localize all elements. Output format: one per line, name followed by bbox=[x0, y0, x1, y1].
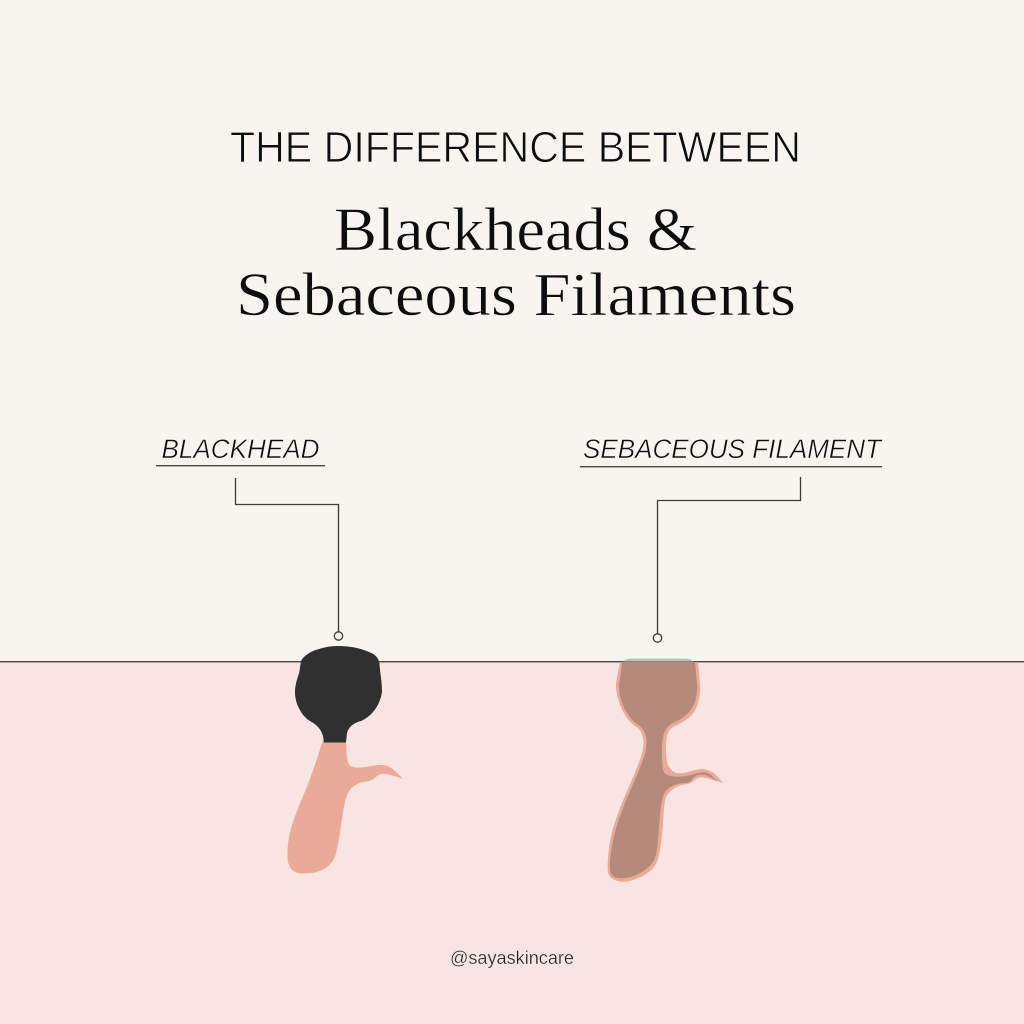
label: sebaceous filament: SEBACEOUS FILAMENT bbox=[583, 434, 883, 464]
label: blackhead: BLACKHEAD bbox=[162, 434, 320, 464]
title bbox=[230, 124, 801, 329]
title line: sebaceous filaments: Sebaceous Filaments bbox=[236, 262, 796, 329]
handle credit: @sayaskincare bbox=[450, 947, 574, 968]
filament sebum at surface bbox=[623, 658, 694, 662]
pore base bbox=[287, 740, 403, 874]
leader line: blackhead bbox=[236, 478, 343, 640]
blackhead plug bbox=[295, 646, 382, 742]
skin background panel bbox=[0, 662, 1024, 1024]
pore lining bbox=[608, 662, 723, 882]
diagram: blackhead pore bbox=[287, 646, 403, 874]
skin surface line bbox=[0, 661, 1024, 662]
title line: the difference between: THE DIFFERENCE BETWEEN bbox=[230, 124, 801, 172]
leader line: sebaceous filament bbox=[653, 477, 800, 642]
filament fill bbox=[610, 662, 718, 878]
title line: blackheads: Blackheads & bbox=[334, 197, 697, 264]
diagram: sebaceous filament pore bbox=[608, 658, 723, 882]
